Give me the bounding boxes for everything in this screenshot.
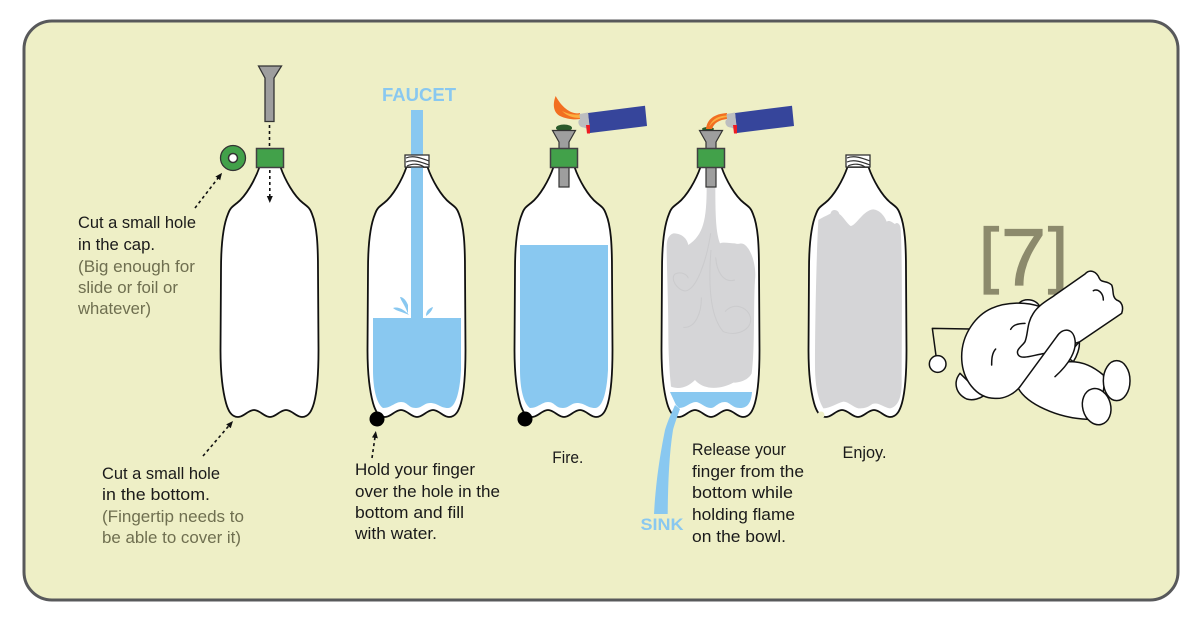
icon: splashes [393,297,433,316]
icon: cap [698,148,724,168]
text: fill instructions: over the hole in the [355,482,500,501]
icon: bowl [552,130,576,149]
step 5: enjoy [808,155,906,462]
icon: bottle [662,167,760,417]
icon: bottom hole gap [818,412,824,418]
heading: rating seven [979,213,1068,303]
icon: herb [556,124,572,132]
text: release instructions: holding flame [692,505,795,524]
text: cap instructions: in the cap. [78,235,155,254]
icon: finger on hole [518,412,532,426]
icon: threaded neck [846,155,870,167]
text: fill instructions [354,460,500,543]
text: fire: Fire. [552,448,583,467]
icon: water [520,245,608,408]
text: bottom instructions: (Fingertip needs to [102,507,244,526]
icon: bowl stem [258,66,282,122]
icon: cap [550,148,578,168]
arrow: to bottom hole [203,424,230,456]
step 2: fill with water [354,84,500,543]
heading: rating seven: [ [979,215,999,295]
icon: bottle [808,167,906,417]
heading: rating seven: 7 [1001,213,1046,303]
icon: flame [706,113,727,129]
step 3: fire [514,96,647,467]
text: bottom instructions [102,464,244,547]
text: cap instructions: (Big enough for [78,257,195,276]
icon: water fill [373,318,461,408]
icon: draining water [670,392,752,408]
icon: finger on hole [370,412,384,426]
text: fill instructions: with water. [354,524,437,543]
icon: lighter [578,106,647,134]
icon: bottle [368,167,466,417]
text: cap instructions: slide or foil or [78,278,178,297]
text: release instructions: bottom while [692,483,793,502]
text: bottom instructions: be able to cover it) [102,528,241,547]
icon: faucet stream [411,110,423,320]
icon: herb [702,127,714,131]
icon: bowl [700,130,722,149]
arrow: into bottle [269,170,271,199]
icon: flame [554,96,580,119]
text: cap instructions: Cut a small hole [78,213,196,232]
text: release instructions: Release your [692,440,786,459]
text: release instructions: finger from the [692,462,804,481]
text: cap instructions: whatever) [77,299,151,318]
icon: passed out character [929,271,1130,428]
icon: smoke [667,187,755,388]
step 4: release [640,106,804,546]
icon: sink stream [654,405,680,514]
text: cap instructions [77,213,196,318]
text: enjoy: Enjoy. [842,443,886,462]
arrow: to finger [372,435,375,458]
heading: rating seven: ] [1048,215,1068,295]
arrow: stem to cap [268,125,270,147]
icon: threaded neck [405,155,429,167]
text: fill instructions: Hold your finger [355,460,475,479]
text: bottom instructions: Cut a small hole [102,464,220,483]
text: release instructions: on the bowl. [692,527,786,546]
icon: empty bottle [220,167,318,417]
icon: cap with hole [220,146,246,170]
icon: stem below cap [706,167,716,187]
text: bottom instructions: in the bottom. [102,485,210,504]
label: sink: SINK [640,515,684,534]
text: release instructions [692,440,804,546]
icon: smoke fill [815,209,902,408]
label: faucet: FAUCET [382,84,457,105]
icon: green cap [256,148,284,168]
icon: bottle [514,167,612,417]
step 1: bottle with cap and stem [77,66,318,547]
icon: stem below cap [559,167,569,187]
text: fill instructions: bottom and fill [355,503,464,522]
icon: lighter [725,106,794,134]
arrow: to cap hole [195,176,220,208]
